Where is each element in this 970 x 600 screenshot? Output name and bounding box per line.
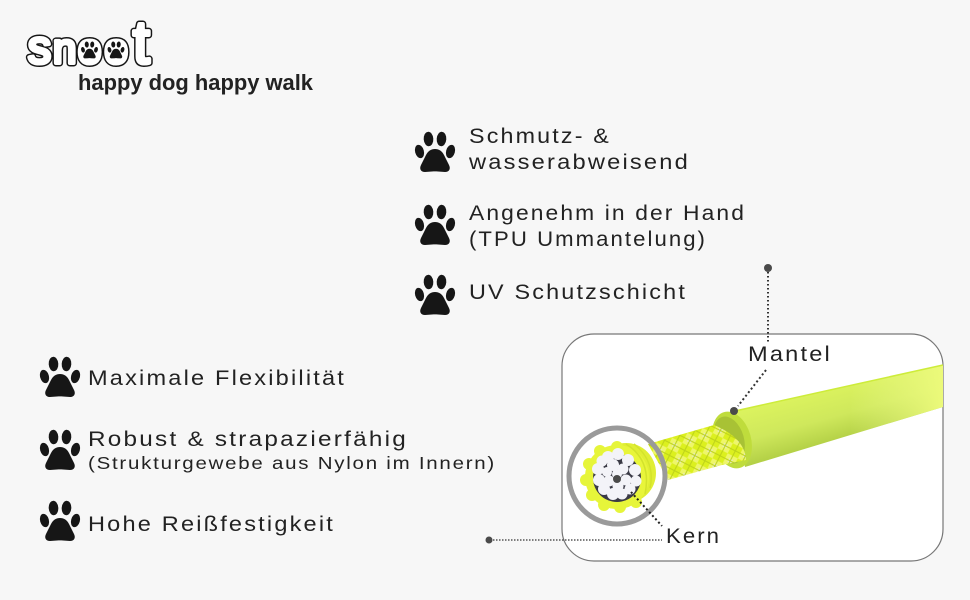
feature: Robust & strapazierfähig: Robust & strapazierfähig — [88, 427, 408, 451]
feature: Robust & strapazierfähig: (Strukturgewebe aus Nylon im Innern) — [88, 453, 496, 473]
logo: snoot: s — [28, 21, 51, 73]
feature: Angenehm in der Hand: Angenehm in der Hand — [469, 201, 746, 225]
feature: Angenehm in der Hand — [413, 201, 746, 251]
feature: Schmutz- & wasserabweisend — [413, 124, 690, 174]
mantle tube — [735, 365, 943, 467]
callout: Mantel: Mantel — [748, 342, 832, 366]
feature: Schmutz- & wasserabweisend: wasserabweisend — [468, 150, 690, 174]
callout: Kern: Kern — [666, 524, 721, 548]
feature: Maximale Flexibilität: Maximale Flexibilität — [88, 366, 346, 390]
yellow rim face — [622, 443, 656, 499]
feature: Hohe Reißfestigkeit — [38, 500, 335, 541]
feature: Maximale Flexibilität — [38, 356, 346, 397]
logo: snoot: t — [133, 9, 150, 76]
logo: snoot: t — [133, 9, 150, 76]
logo: snoot: o — [78, 25, 101, 72]
feature: UV Schutzschicht: UV Schutzschicht — [469, 280, 687, 304]
braided rope — [648, 425, 746, 480]
logo: snoot: o — [78, 25, 101, 72]
logo: snoot: s — [28, 21, 51, 73]
logo: snoot: o — [104, 25, 128, 72]
logo: snoot: n — [53, 25, 76, 72]
callout: Mantel — [730, 264, 832, 415]
feature: Robust & strapazierfähig — [38, 427, 496, 473]
cable illustration — [580, 365, 943, 513]
logo: snoot: o — [104, 25, 128, 72]
feature: Hohe Reißfestigkeit: Hohe Reißfestigkeit — [88, 512, 335, 536]
callout: Kern — [486, 475, 721, 548]
feature: Schmutz- & wasserabweisend: Schmutz- & — [469, 124, 611, 148]
logo: snoot: n — [53, 25, 76, 72]
mantle cut end — [713, 412, 752, 468]
logo: snoot — [28, 9, 150, 76]
panel: cable cross-section — [562, 334, 943, 561]
tagline: happy dog happy walk — [78, 70, 314, 95]
feature: Angenehm in der Hand: (TPU Ummantelung) — [469, 227, 707, 251]
magnifier ring — [569, 428, 665, 524]
feature: UV Schutzschicht — [413, 274, 687, 315]
wire core — [593, 454, 641, 502]
